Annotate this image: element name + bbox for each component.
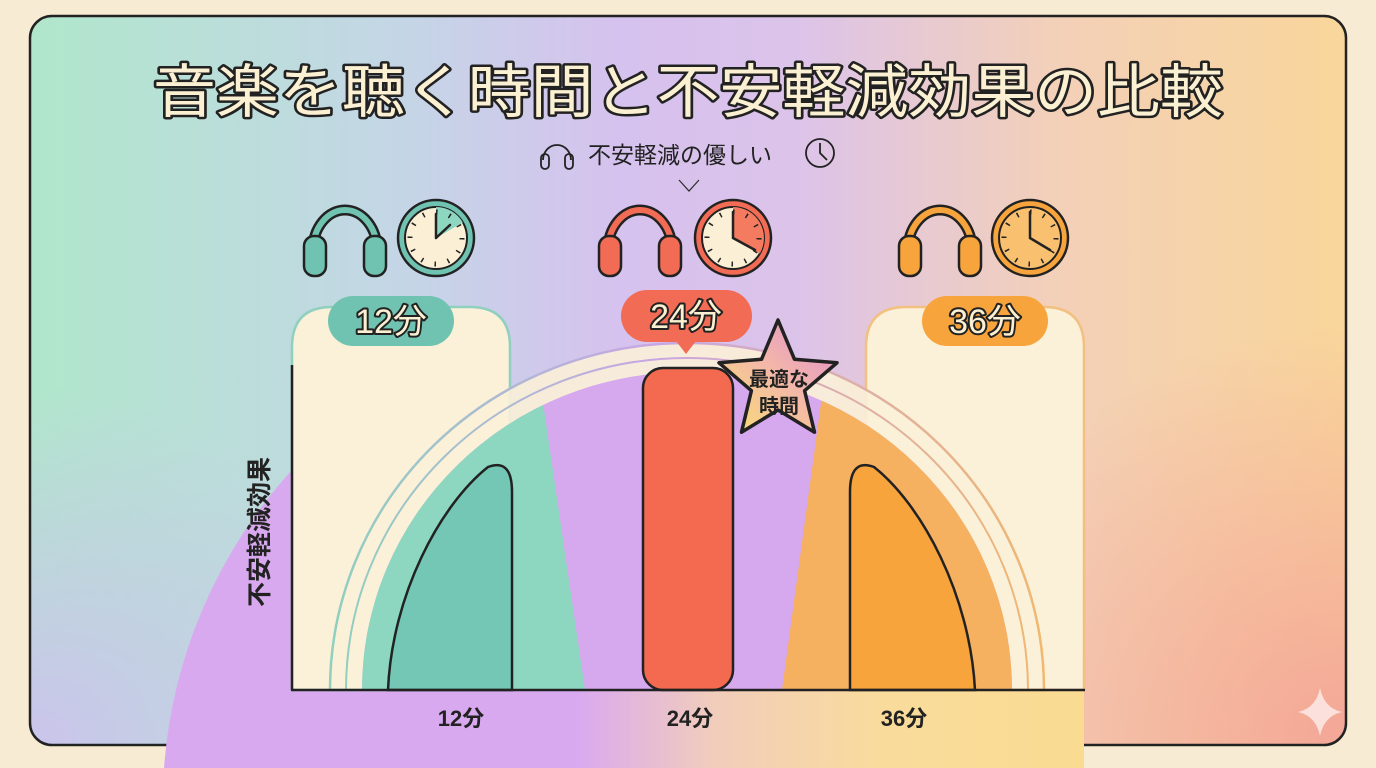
subtitle with icons: 不安軽減の優しい (588, 142, 772, 168)
star callout: optimal time: 時間 (759, 395, 799, 418)
group: 36分 icons (899, 200, 1068, 276)
purple backdrop blob (164, 470, 1084, 768)
group: 24分 icons (599, 200, 771, 276)
panel: 36分 column background (866, 307, 1084, 690)
x-axis labels: 36分 (881, 706, 927, 731)
star callout: optimal time (719, 320, 837, 432)
x-axis labels: 24分 (667, 706, 713, 731)
title: 音楽を聴く時間と不安軽減効果の比較 (153, 60, 1223, 125)
icon: sparkle (1298, 688, 1342, 736)
axes (291, 365, 1085, 690)
icon: red headphones (599, 210, 681, 276)
icon: teal clock (398, 200, 474, 276)
pill: 24分 with pointer (621, 290, 752, 354)
icon: red clock (695, 200, 771, 276)
subtitle with icons (541, 139, 834, 191)
pill: 36分: 36分 (949, 303, 1021, 341)
x-axis labels (438, 706, 927, 731)
icon: orange headphones (899, 210, 981, 276)
panel: 12分 column background (292, 307, 510, 690)
y-axis label: 不安軽減効果 (246, 457, 274, 607)
teal cone (362, 405, 585, 689)
icon: orange clock (992, 200, 1068, 276)
pill: 12分: 12分 (355, 303, 427, 341)
star callout: optimal time: 最適な (749, 368, 809, 391)
pill: 36分 (922, 296, 1048, 346)
icon: teal headphones (304, 210, 386, 276)
rainbow arch (328, 342, 1046, 692)
group: 12分 icons (304, 200, 474, 276)
bar: 36分 (850, 465, 975, 690)
pill: 24分 with pointer: 24分 (650, 298, 722, 336)
bar: 12分 (388, 465, 512, 690)
x-axis labels: 12分 (438, 706, 484, 731)
chevron (679, 180, 699, 191)
bar: 24分 (643, 368, 733, 690)
pill: 12分 (328, 296, 454, 346)
icon: small headphones (541, 145, 573, 169)
icon: small clock (806, 139, 834, 167)
orange cone (782, 400, 1012, 689)
